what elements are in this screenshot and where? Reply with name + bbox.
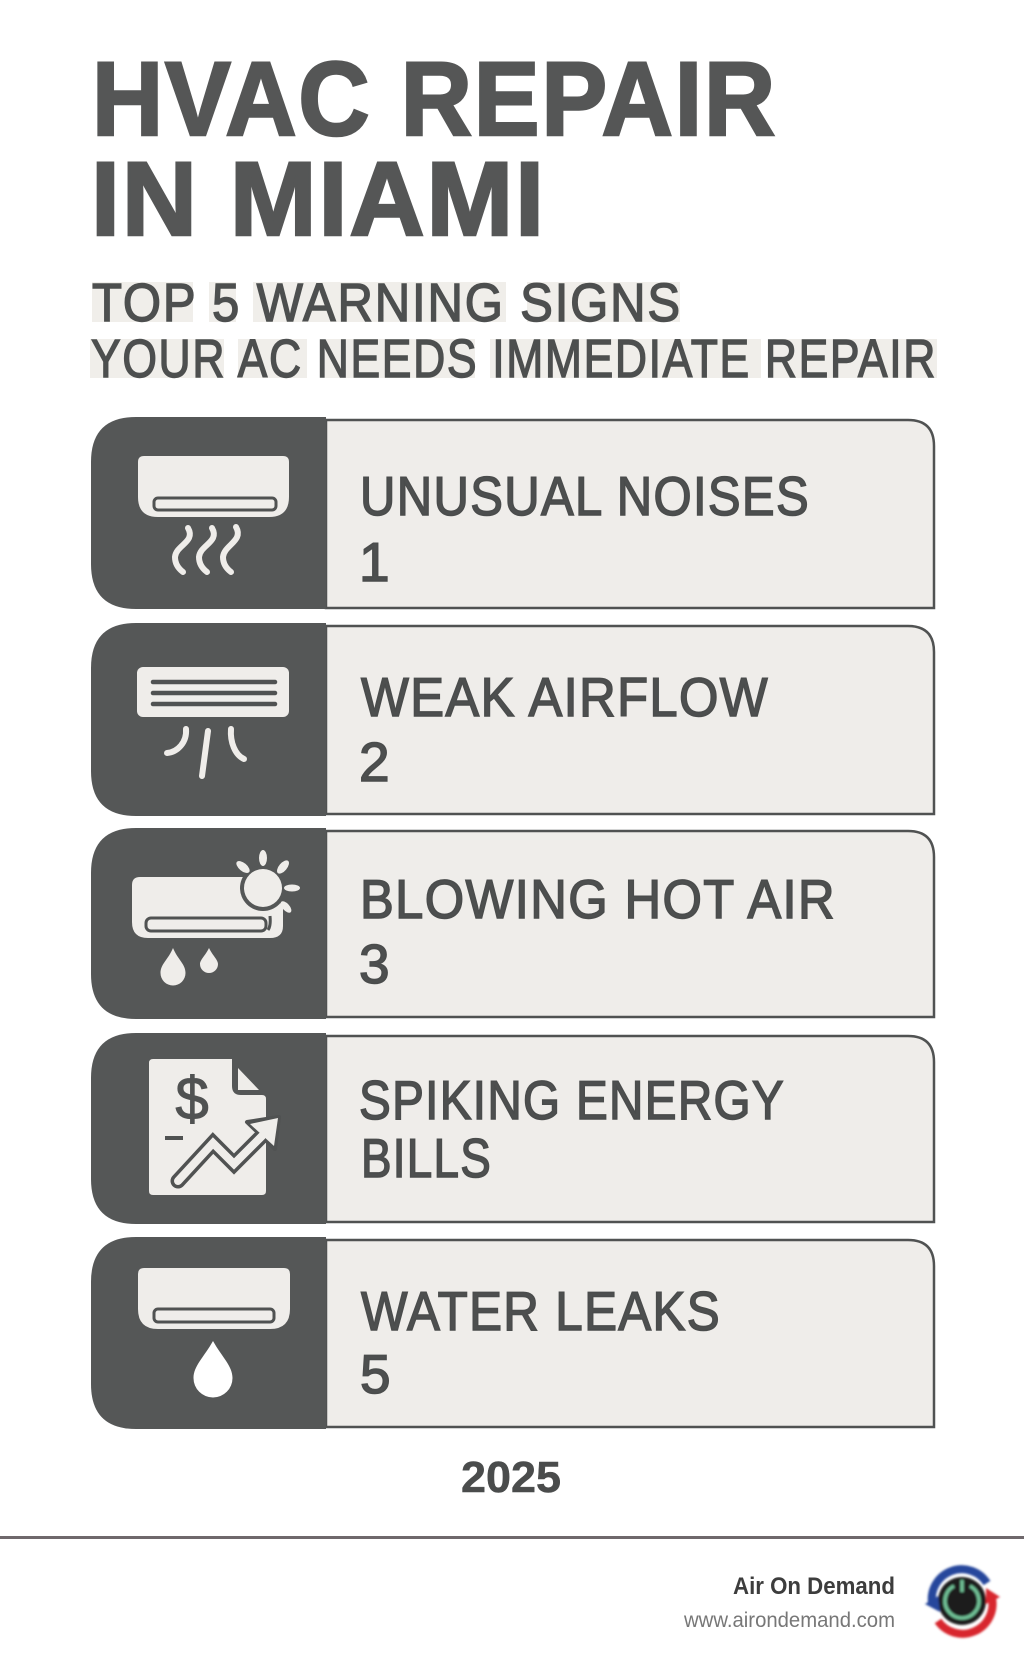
icon: bill with rising arrow: $ [175, 1065, 209, 1132]
label: weak airflow: WEAK AIRFLOW [361, 666, 769, 728]
title: IN MIAMI [91, 141, 546, 258]
subtitle: TOP 5 WARNING SIGNS [92, 273, 682, 333]
title: HVAC REPAIR [92, 41, 777, 158]
year: 2025 [461, 1453, 561, 1502]
label: unusual noises: UNUSUAL NOISES [360, 465, 810, 527]
label: spiking energy: SPIKING ENERGY [359, 1069, 785, 1131]
panel: spiking energy bills [91, 1033, 934, 1224]
panel: unusual noises [91, 417, 934, 609]
brand name: Air On Demand [733, 1573, 895, 1600]
number 3: 3 [359, 933, 391, 995]
number 1: 1 [359, 531, 391, 593]
logo [925, 1569, 1000, 1634]
icon: bill with rising arrow [149, 1059, 279, 1195]
panel: blowing hot air [91, 828, 934, 1019]
panel: weak airflow [91, 623, 934, 816]
icon: ac unit with sun and drips [132, 850, 300, 985]
label: blowing hot air: BLOWING HOT AIR [360, 868, 836, 930]
footer divider [0, 1536, 1024, 1539]
label: bills: BILLS [361, 1127, 492, 1189]
number 5: 5 [360, 1343, 392, 1405]
icon: ac unit with water drop [138, 1268, 290, 1398]
number 2: 2 [359, 731, 391, 793]
title [91, 41, 777, 258]
label: water leaks: WATER LEAKS [361, 1280, 721, 1342]
subtitle [90, 273, 937, 389]
icon: ac unit with noise waves [138, 456, 289, 572]
panel: water leaks [91, 1237, 934, 1429]
website: www.airondemand.com [683, 1609, 895, 1632]
icon: vent with weak air [137, 667, 289, 776]
